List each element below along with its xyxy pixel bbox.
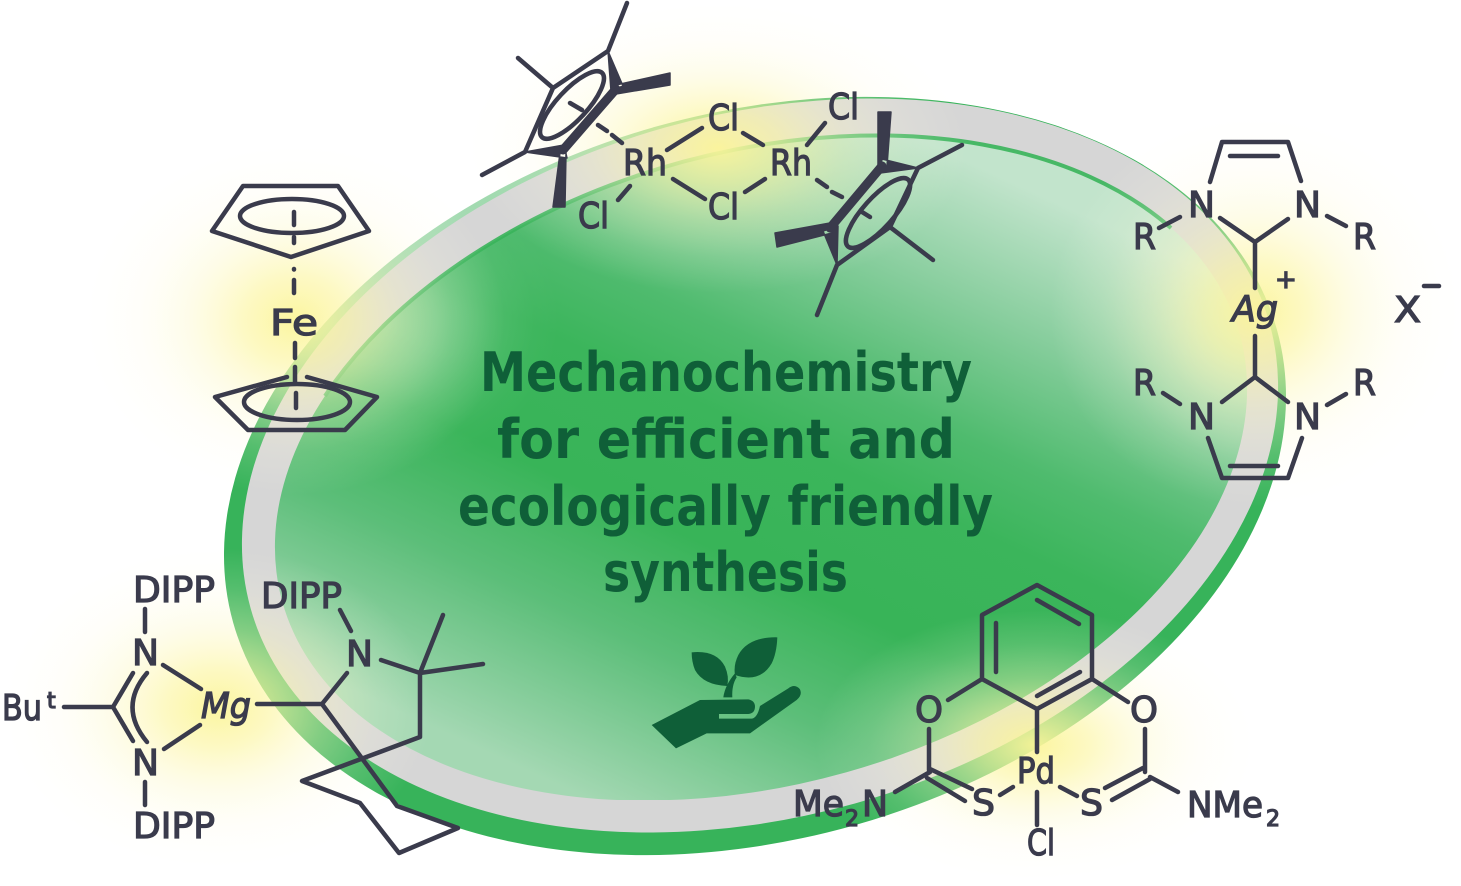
pincer labels: N	[862, 784, 888, 825]
title line 4: synthesis	[603, 541, 848, 604]
carbene ligand labels: DIPP	[261, 576, 342, 617]
amidinate labels: Bu	[2, 688, 42, 729]
molecule: ferrocene	[212, 186, 377, 430]
rhodium and chloride labels: Cl	[578, 196, 609, 237]
icon: hand holding seedling	[652, 637, 801, 748]
amidinate bonds	[64, 609, 201, 805]
rhodium and chloride labels: Cl	[708, 187, 739, 228]
disc thin inner edge line	[325, 135, 1171, 396]
pincer labels	[793, 690, 1280, 864]
upper imidazole ring	[1159, 142, 1346, 288]
pincer labels: O	[915, 690, 943, 731]
glow: palladium centre	[815, 610, 1255, 880]
panel: green tilted disc	[210, 97, 1370, 855]
rhodium and chloride labels	[578, 87, 859, 237]
molecule: silver bis-NHC complex	[1133, 142, 1439, 478]
lower imidazole ring	[1163, 336, 1346, 478]
molecule: rhodium dimer	[482, 3, 962, 315]
amidinate labels: DIPP	[133, 806, 215, 847]
pincer labels: NMe	[1187, 785, 1263, 826]
silver complex labels: R	[1133, 363, 1156, 404]
pincer labels: Me	[793, 784, 844, 825]
carbene ligand labels: N	[346, 634, 373, 675]
amidinate labels: N	[132, 633, 159, 674]
amidinate labels: N	[132, 743, 159, 784]
rhodium and chloride labels: Cl	[708, 98, 739, 139]
molecule: palladium pincer complex	[793, 585, 1280, 864]
silver complex labels: N	[1294, 397, 1321, 438]
silver complex labels: R	[1353, 363, 1376, 404]
pincer labels: 2	[845, 807, 859, 832]
pincer labels: S	[1080, 783, 1103, 824]
disc outer green edge	[224, 97, 1286, 855]
pincer arm bonds	[895, 679, 1178, 825]
glow: iron centre	[85, 145, 505, 495]
glow: magnesium centre	[3, 548, 433, 868]
silver complex labels: R	[1353, 217, 1376, 258]
rhodium and chloride labels: Rh	[623, 143, 667, 184]
pincer labels: S	[972, 783, 995, 824]
pincer labels: Cl	[1027, 823, 1055, 864]
iron label: Fe	[270, 303, 318, 344]
cyclopentadienyl ring bottom	[215, 377, 377, 430]
aromatic ring	[982, 585, 1092, 709]
silver complex labels	[1133, 185, 1376, 438]
silver complex labels: N	[1188, 397, 1215, 438]
title line 3: ecologically friendly	[458, 475, 993, 538]
disc inner green face	[274, 138, 1247, 800]
molecule: magnesium amidinate complex	[2, 570, 483, 853]
title line 2: for efficient and	[497, 408, 955, 471]
amidinate labels: t	[47, 689, 56, 714]
amidinate labels: DIPP	[133, 570, 215, 611]
title	[458, 341, 993, 604]
silver complex labels: N	[1188, 185, 1215, 226]
left pentamethylcyclopentadienyl ring	[482, 3, 670, 207]
counter-anion X minus: X	[1394, 290, 1421, 331]
amidinate labels	[2, 570, 251, 847]
rhodium and chloride labels: Rh	[770, 143, 812, 184]
pincer labels: Pd	[1017, 751, 1055, 792]
glow: rhodium centre	[468, 3, 968, 293]
cyclopentadienyl ring top	[212, 186, 369, 257]
carbene ligand labels	[261, 576, 373, 675]
silver complex labels: N	[1294, 185, 1321, 226]
silver complex labels: +	[1275, 265, 1297, 295]
pincer labels: O	[1130, 690, 1158, 731]
pincer labels: 2	[1266, 807, 1280, 832]
title line 1: Mechanochemistry	[480, 341, 972, 404]
rhodium and chloride labels: Cl	[828, 87, 859, 128]
right pentamethylcyclopentadienyl ring	[775, 112, 962, 315]
silver complex labels: R	[1133, 217, 1156, 258]
silver complex labels: Ag	[1230, 289, 1278, 330]
carbene ligand bonds	[257, 610, 483, 853]
counter-anion X minus	[1394, 286, 1439, 331]
glow: silver centre	[1050, 117, 1460, 507]
amidinate labels: Mg	[201, 686, 251, 727]
rhodium bridge bonds	[618, 123, 825, 200]
disc grey rim	[242, 99, 1278, 832]
